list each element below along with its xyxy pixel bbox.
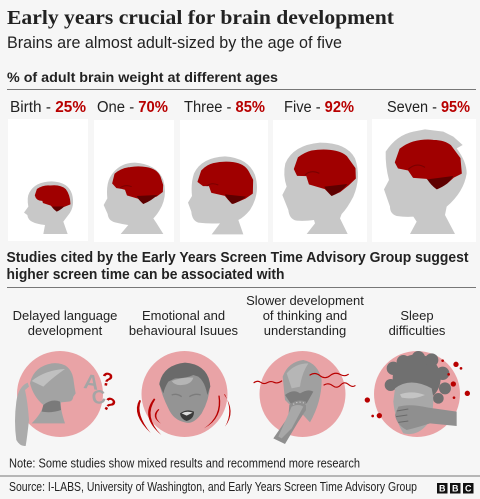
label: sleep difficulties: Sleep [400,308,434,323]
label: emotional issues: behavioural Isuues [129,323,239,338]
section heading: screen time studies: higher screen time can be associated with [6,267,284,283]
icon: girl with ponytail and letters: A [82,370,100,395]
label: slower development [246,293,364,338]
BBC logo [437,483,474,494]
age label: Birth: Birth - 25% [10,99,86,116]
label: emotional issues [129,308,239,338]
icon: girl with ponytail and letters: ? [99,392,120,416]
label: slower development: of thinking and [263,308,347,323]
panel: age five head [273,120,367,242]
subtitle: Brains are almost adult-sized by the age of five [7,34,342,52]
icon: girl with ponytail and letters: C [90,387,107,409]
label: delayed language: Delayed language [13,308,117,323]
label: emotional issues: Emotional and [142,308,225,323]
label: sleep difficulties: difficulties [389,323,446,338]
icon: girl with ponytail and letters: ? [100,368,115,391]
icon: child with hand on head and wavy lines [254,351,355,444]
icon: girl with ponytail and letters [15,351,120,446]
icon: shouting child [137,351,231,437]
age label: One: One - 70% [97,99,168,116]
section heading: screen time studies: Studies cited by the Early Years Screen Time Advisory Group suggest [6,250,469,266]
icon: curly-haired child with hand over mouth [365,351,470,437]
BBC logo: C [465,484,472,494]
age label: Seven: Seven - 95% [387,99,470,116]
age label: Three: Three - 85% [184,99,265,116]
note: Note: Some studies show mixed results and recommend more research [9,456,360,470]
section heading: brain weight: % of adult brain weight at different ages [7,69,278,85]
BBC logo: B [439,484,446,494]
section heading: screen time studies [6,250,469,283]
panel: age one head [94,120,174,242]
label: delayed language: development [28,323,103,338]
panel: age seven head [372,119,476,242]
label: slower development: Slower development [246,293,364,308]
BBC logo: B [452,484,459,494]
age label: Five: Five - 92% [284,99,354,116]
label: delayed language [13,308,117,338]
panel: age three head [180,120,268,242]
title: Early years crucial for brain development [7,7,394,29]
label: sleep difficulties [389,308,446,338]
label: slower development: understanding [264,323,346,338]
panel: birth head [8,119,88,241]
